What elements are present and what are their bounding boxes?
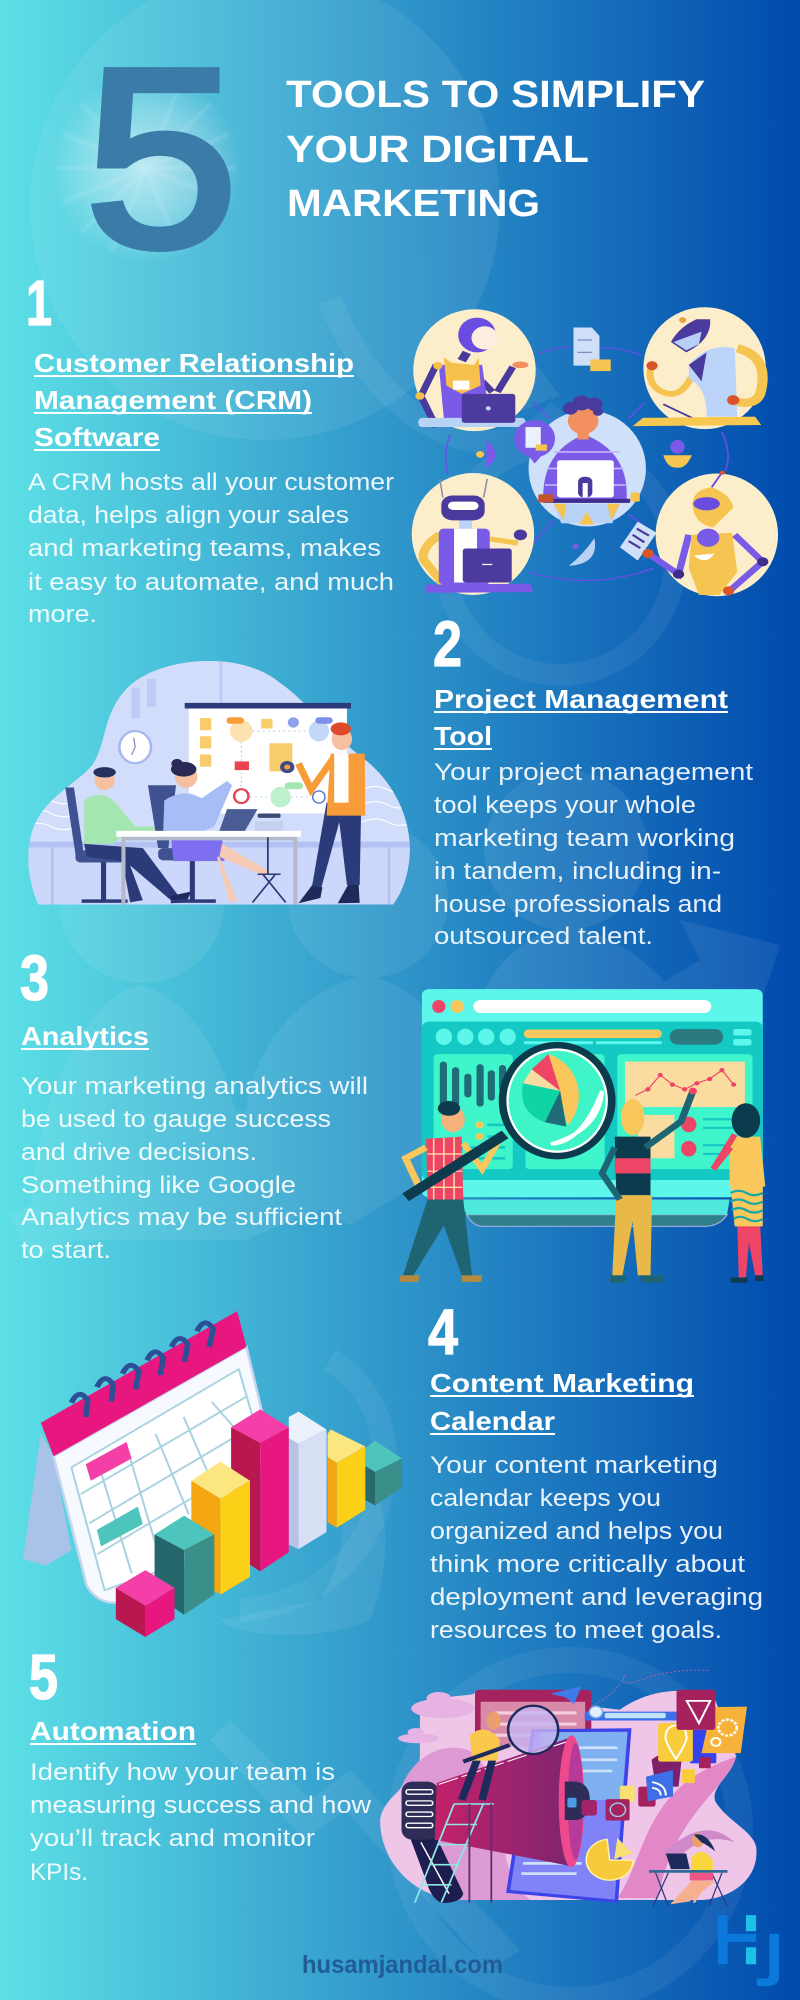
heading: CRM software: Customer Relationship [34,348,354,378]
calendar page [54,1347,270,1603]
bar: small teal [365,1441,402,1505]
number 3: 3 [20,942,49,1014]
title: TOOLS TO SIMPLIFY [286,74,705,116]
illustration: robots around a worker [412,307,778,596]
man with magnifier [462,1706,558,1800]
icon: pie chart [586,1838,633,1880]
body text: CRM: and marketing teams, makes [28,535,381,562]
connecting arrows [446,347,728,581]
robot top right [633,307,766,429]
bar: white [289,1412,327,1549]
heading: content marketing calendar [430,1368,694,1436]
panel: section 4 content calendar text [428,1296,763,1644]
body text: automation: measuring success and how [30,1792,372,1819]
calendar header [41,1311,246,1456]
body text: analytics [21,1073,368,1264]
body text: content calendar: deployment and leveraging [430,1584,763,1611]
bar: teal [155,1516,214,1615]
floating document [573,328,611,371]
background watermark rings [240,300,740,2000]
body text: content calendar: organized and helps you [430,1518,723,1545]
panel: section 5 automation text [29,1641,372,1886]
dashed flight path [592,1670,710,1706]
heading: content marketing calendar: Content Marketing [430,1368,694,1398]
heading: CRM software [34,348,354,452]
body text: CRM [28,469,394,628]
body text: CRM: data, helps align your sales [28,502,349,529]
calendar stand [23,1434,71,1566]
footer website: husamjandal.com [302,1951,503,1979]
body text: automation: you’ll track and monitor [30,1825,315,1852]
icon: wifi card [646,1770,673,1801]
ladder poles [469,1804,491,1903]
megaphone [402,1735,597,1903]
icon: message card [677,1690,715,1730]
bar: pink cube [116,1570,174,1637]
magnifying glass with pie chart [406,1043,614,1197]
logo HJ [718,1915,779,1986]
panel: section 3 analytics text [20,942,368,1264]
panel: section 2 project management text [433,608,753,950]
heading: project management tool: Tool [434,721,492,751]
bar: tall yellow [191,1462,250,1595]
body text: content calendar [430,1452,763,1644]
body text: analytics: be used to gauge success [21,1106,331,1133]
heading: analytics: Analytics [21,1021,149,1051]
body text: analytics: Analytics may be sufficient [21,1204,342,1231]
person with wavy skirt [713,1103,765,1283]
title [286,74,705,225]
heading: CRM software: Software [34,422,160,452]
body text: content calendar: Your content marketing [430,1452,718,1479]
clouds [398,1692,474,1743]
panel: section 1 CRM text [26,267,394,628]
person in red striped shirt [399,1101,503,1282]
presenter in orange jacket [298,722,365,903]
presentation board [185,703,351,813]
body text: automation: KPIs. [30,1859,88,1886]
number 1: 1 [26,267,52,339]
body text: automation [30,1759,372,1886]
wall clock [119,731,151,763]
body text: content calendar: think more critically about [430,1551,745,1578]
body text: project management: house professionals and [434,891,722,918]
body text: analytics: to start. [21,1237,111,1264]
body text: project management: marketing team working [434,825,735,852]
icon: gear card [702,1707,747,1753]
body text: CRM: it easy to automate, and much [28,569,394,596]
dashboard window [422,989,763,1226]
body text: content calendar: resources to meet goals. [430,1617,722,1644]
title: MARKETING [287,183,540,225]
blob background [28,661,410,904]
heading: automation: Automation [30,1716,196,1746]
robot bottom left [412,473,534,595]
seated woman in blue [148,759,270,903]
big numeral glow [51,73,241,263]
illustration: calendar with 3D bars [23,1311,402,1637]
icon: globe card [606,1799,630,1821]
back card [475,1690,591,1746]
ladder [415,1804,494,1903]
big numeral 5: 5 [84,16,238,301]
speech bubble [514,420,555,464]
heading: CRM software: Management (CRM) [34,385,312,415]
worker at center [529,396,646,527]
seated man in green [65,767,191,903]
pink blob background [380,1691,756,1900]
bar: short yellow [328,1429,365,1528]
icon: location pin card [658,1723,693,1762]
robot bottom right [620,471,778,596]
illustration: team at a presentation board [20,649,418,909]
illustration: analytics dashboard with magnifier [399,989,765,1283]
blue document [508,1730,630,1901]
heading: project management tool [434,684,728,751]
search bar [585,1706,685,1721]
body text: content calendar: calendar keeps you [430,1485,661,1512]
number 4: 4 [428,1296,458,1368]
heading: project management tool: Project Management [434,684,728,714]
body text: project management [434,759,753,950]
body text: project management: outsourced talent. [434,923,653,950]
body text: analytics: Something like Google [21,1172,296,1199]
title: YOUR DIGITAL [286,129,589,171]
woman at laptop desk [649,1833,728,1906]
illustration: megaphone marketing scene [380,1670,756,1906]
person with raised arm [602,1088,697,1283]
body text: analytics: Your marketing analytics will [21,1073,368,1100]
robot top left [413,309,536,431]
body text: automation: Identify how your team is [30,1759,335,1786]
bar: tall pink [231,1409,289,1571]
paper plane [550,1686,582,1704]
calendar rings [71,1323,213,1417]
number 5: 5 [29,1641,58,1713]
number 2: 2 [433,608,462,680]
heading: content marketing calendar: Calendar [430,1406,555,1436]
body text: CRM: more. [28,601,97,628]
body text: project management: in tandem, including in- [434,858,721,885]
body text: CRM: A CRM hosts all your customer [28,469,394,496]
small floating squares [620,1730,716,1807]
small shapes [476,440,692,566]
body text: project management: tool keeps your whole [434,792,696,819]
desk with laptop [116,809,301,905]
body text: project management: Your project management [434,759,753,786]
body text: analytics: and drive decisions. [21,1139,257,1166]
